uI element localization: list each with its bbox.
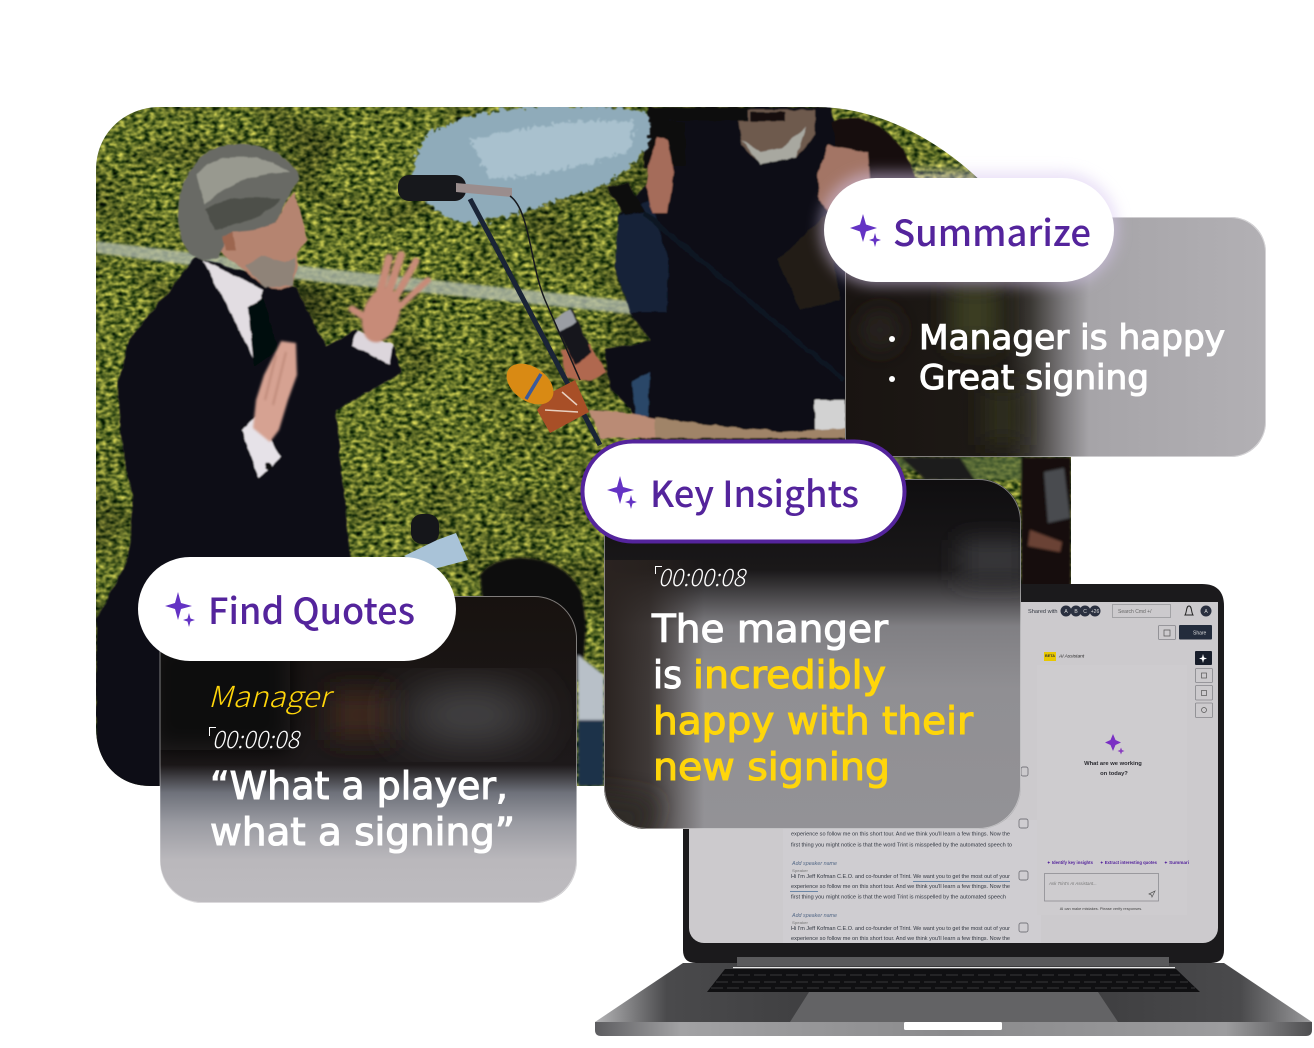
laptop lid (683, 584, 1224, 963)
card edge (604, 480, 1020, 828)
assistant sparkle prompt: What are we working (1084, 761, 1142, 767)
side tool buttons (1195, 651, 1212, 718)
boom pole (644, 213, 844, 380)
quote text: what a signing” (210, 810, 515, 854)
share buttons: Share (1193, 630, 1207, 636)
insight text: is (653, 653, 682, 697)
transcript text: Speaker (792, 869, 809, 873)
man in black suit (96, 144, 401, 790)
quote text: “What a player, (210, 764, 508, 808)
tan sleeve (650, 417, 846, 438)
transcript text: first thing you might notice is that the word Trint is misspelled by the automated speech (791, 894, 1006, 900)
assistant input box: Ask Trint's AI Assistant... (1048, 881, 1097, 886)
bell and avatar: A (1204, 609, 1208, 615)
laptop screen (689, 602, 1218, 943)
transcript text: experience so follow me on this short tour. And we think you'll learn a few things. Now the (791, 936, 1010, 942)
suggestion chips: ✦ Summari (1164, 860, 1189, 865)
summary bullet points: Great signing (919, 358, 1149, 398)
woman journalist (832, 117, 916, 178)
insight text: The manger (651, 607, 888, 651)
laptop base (595, 963, 1312, 1022)
speaker name: Manager (208, 674, 335, 716)
white pitch line (96, 241, 650, 316)
summary bullet points (889, 318, 1225, 398)
label: Summarize (893, 205, 1091, 257)
crowd on the right (553, 107, 915, 440)
transcript text: experience so follow me on this short tour. And we think you'll learn a few things. Now the (791, 832, 1010, 838)
camera body (644, 120, 686, 168)
front lip (595, 1022, 1312, 1036)
transcript text: Add speaker name (791, 861, 837, 867)
background grass and figure, lower right (480, 457, 1071, 786)
orange reporter microphone (506, 364, 589, 433)
AI assistant header: AI Assistant (1058, 654, 1085, 660)
transcript text: Hi I'm Jeff Kofman C.E.O. and co-founder of Trint. We want you to get the most out of your (791, 926, 1010, 932)
handheld shotgun microphone and stand (398, 175, 600, 445)
assistant input box (1044, 874, 1158, 901)
suggestion chips: ✦ Extract interesting quotes (1100, 860, 1158, 865)
AI assistant header (1044, 652, 1085, 661)
laptop (595, 584, 1312, 1036)
suggestion chips (1047, 860, 1189, 865)
suggestion chips: ✦ Identify key insights (1047, 860, 1094, 865)
transcript checkboxes (1019, 767, 1028, 932)
transcript text: Speaker (792, 921, 809, 925)
furry boom microphone (413, 105, 650, 223)
top bar: shared with: A (1064, 609, 1068, 615)
transcript text: experience so follow me on this short tour. And we think you'll learn a few things. Now the (791, 884, 1010, 890)
assistant sparkle prompt (1084, 734, 1142, 777)
icon: sparkle (850, 214, 881, 247)
transcript text (791, 832, 1012, 942)
transcript text: Add speaker name (791, 913, 837, 919)
label: Key Insights (650, 466, 859, 518)
grass field (90, 100, 1080, 790)
panel: key insights glass card (590, 479, 1030, 845)
bell and avatar (1185, 606, 1212, 616)
panel: summarize glass card (845, 217, 1266, 457)
recorder and hand (561, 345, 607, 382)
AI assistant header: BETA (1045, 654, 1055, 658)
pill: key insights (582, 442, 904, 542)
icon: sparkle (607, 476, 637, 509)
insight text: incredibly (693, 653, 886, 697)
top bar: shared with: +26 (1091, 609, 1099, 615)
timestamp: 00:00:08 (212, 720, 302, 755)
insight text: happy with their (653, 699, 973, 743)
timestamp: 00:00:08 (658, 558, 748, 593)
share buttons (1158, 625, 1212, 640)
top bar: shared with (1028, 606, 1100, 616)
icon: sparkle (165, 592, 195, 627)
panel: press interview photo (90, 100, 1080, 790)
keyboard (707, 969, 1200, 992)
summary bullet points: Manager is happy (919, 318, 1225, 358)
small reporter microphone (404, 514, 468, 570)
search box: Search Cmd +/ (1118, 609, 1152, 615)
hinge (737, 957, 1169, 966)
trackpad (790, 992, 1118, 1022)
hinge highlight (733, 967, 1175, 968)
top bar: shared with: B (1074, 609, 1078, 615)
cameraman (737, 110, 815, 163)
ID badge (815, 400, 845, 430)
card edge (160, 596, 576, 902)
card edge (846, 218, 1266, 456)
search box (1112, 604, 1170, 618)
raised right hand (352, 255, 428, 347)
transcript text: first thing you might notice is that the word Trint is misspelled by the automated speech to (791, 842, 1012, 848)
highlighted transcript underline (790, 882, 1010, 892)
top bar: shared with: Shared with (1028, 609, 1058, 615)
quote text (210, 764, 515, 854)
panel: find quotes glass card (150, 596, 577, 903)
pill: summarize (820, 172, 1118, 286)
boom handle (607, 183, 646, 215)
top bar: shared with: C (1083, 609, 1087, 615)
insight text (651, 607, 973, 789)
label: Find Quotes (208, 583, 415, 635)
assistant sparkle prompt: on today? (1100, 771, 1128, 777)
transcript text: Hi I'm Jeff Kofman C.E.O. and co-founder of Trint. We want you to get the most out of your (791, 874, 1010, 880)
disclaimer: AI can make mistakes. Please verify responses. (1060, 906, 1142, 911)
lid notch (904, 1022, 1002, 1030)
insight text: new signing (653, 745, 890, 789)
left hand at chest (253, 341, 297, 442)
pill: find quotes (138, 557, 456, 661)
camera hand (646, 137, 674, 213)
